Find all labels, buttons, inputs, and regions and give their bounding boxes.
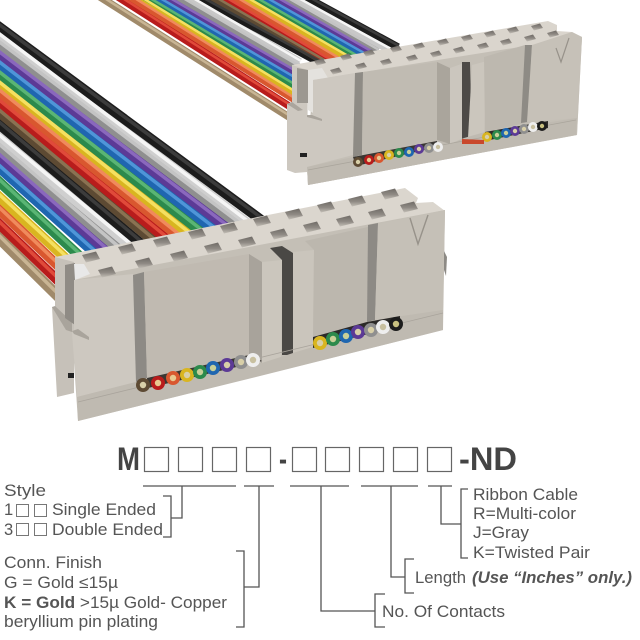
ribbon cable legend: Ribbon Cable — [473, 486, 578, 504]
length legend: Length — [415, 569, 466, 587]
style legend: Double Ended — [52, 521, 163, 539]
connector finish legend: Conn. Finish — [4, 554, 102, 572]
ribbon cable legend — [473, 486, 591, 562]
connector finish legend: K = Gold >15µ Gold- Copper — [4, 594, 228, 612]
connector finish legend: beryllium pin plating — [4, 613, 158, 631]
style legend: 1 — [4, 501, 13, 519]
upper connector wire ends — [353, 121, 548, 167]
ribbon cable legend: R=Multi-color — [473, 505, 577, 523]
lower connector — [52, 188, 447, 421]
part number heading: M — [117, 441, 140, 477]
upper connector body — [287, 21, 582, 185]
part number heading: -ND — [459, 441, 517, 477]
part number heading — [117, 441, 517, 477]
ribbon cable legend: K=Twisted Pair — [473, 544, 591, 562]
lower ribbon cable — [0, 22, 265, 312]
upper connector — [287, 21, 582, 185]
style legend — [4, 482, 163, 539]
upper connector square holes — [314, 24, 559, 74]
lower connector wire ends — [136, 316, 403, 392]
ribbon cable legend: J=Gray — [473, 524, 530, 542]
style legend: Single Ended — [52, 501, 156, 519]
lower connector body — [52, 188, 447, 421]
style legend: 3 — [4, 521, 13, 539]
number of contacts legend: No. Of Contacts — [382, 603, 505, 621]
connector finish legend — [4, 554, 228, 631]
length legend: (Use “Inches” only.) — [472, 569, 633, 587]
connector finish legend: G = Gold ≤15µ — [4, 574, 119, 592]
upper ribbon cable — [97, 0, 399, 124]
part number heading: - — [279, 441, 287, 477]
connector bracket lines — [143, 486, 468, 627]
style legend: Style — [4, 482, 46, 500]
lower connector square holes — [82, 188, 418, 278]
